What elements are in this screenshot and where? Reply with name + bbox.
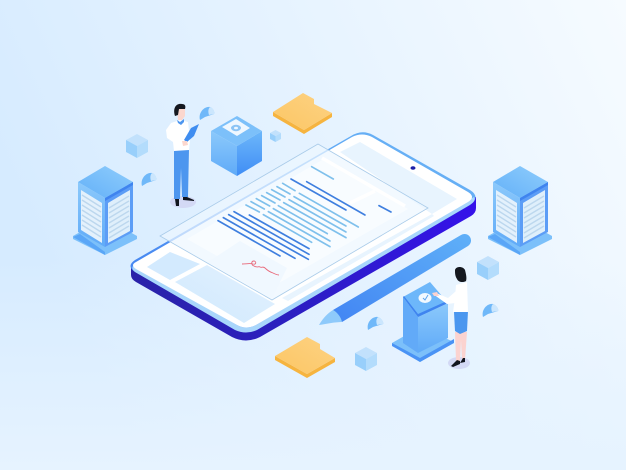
screen block: left small: [147, 252, 200, 280]
white band: [322, 158, 405, 206]
man hair: [174, 104, 185, 116]
document body: [187, 160, 408, 287]
man with tablet: [166, 104, 199, 208]
small cube: top centre: [270, 130, 281, 142]
phone side: [131, 197, 476, 340]
screen block: lower right: [282, 214, 434, 301]
tablet: [184, 124, 199, 142]
half dome: left: [142, 173, 156, 186]
man hand: [182, 141, 188, 146]
woman torso: [453, 282, 468, 312]
half dome: right: [483, 304, 498, 317]
man head: [177, 108, 185, 120]
woman shoes: [451, 358, 465, 367]
document sheet: [160, 144, 428, 300]
phone lower light band: [132, 197, 475, 332]
woman arm: [433, 291, 456, 304]
signature: [242, 261, 279, 275]
pencil: [319, 234, 471, 325]
server rack right: [488, 166, 552, 255]
man shoes: [175, 197, 194, 206]
man legs: [174, 149, 189, 199]
folder bottom: [275, 337, 335, 378]
woman hand: [432, 292, 439, 296]
woman skirt: [454, 311, 468, 334]
cube with disc: [211, 116, 262, 176]
half dome: near man: [200, 107, 214, 120]
ballot podium: [392, 282, 454, 362]
camera: [410, 166, 416, 170]
man torso: [166, 120, 190, 151]
text lines: light: [246, 167, 358, 247]
small cube: bottom: [355, 347, 377, 371]
server rack left: [73, 166, 137, 255]
folder top: [273, 93, 332, 134]
phone: [130, 132, 476, 340]
screen block: upper right: [340, 142, 457, 214]
screen block: lower left: [175, 265, 275, 323]
phone rim: [130, 132, 476, 332]
icon: disc on cube: [222, 119, 250, 136]
woman at podium: [432, 267, 470, 369]
phone face: [133, 134, 472, 328]
text lines: dark: [218, 179, 391, 259]
icon: check badge: [418, 293, 432, 303]
man collar: [177, 119, 184, 125]
signature box: [208, 241, 287, 298]
half dome: bottom: [368, 317, 383, 330]
small cube: upper left: [126, 134, 148, 158]
woman head and hair: [455, 267, 466, 282]
woman legs: [455, 332, 467, 361]
small cube: right: [477, 256, 499, 280]
